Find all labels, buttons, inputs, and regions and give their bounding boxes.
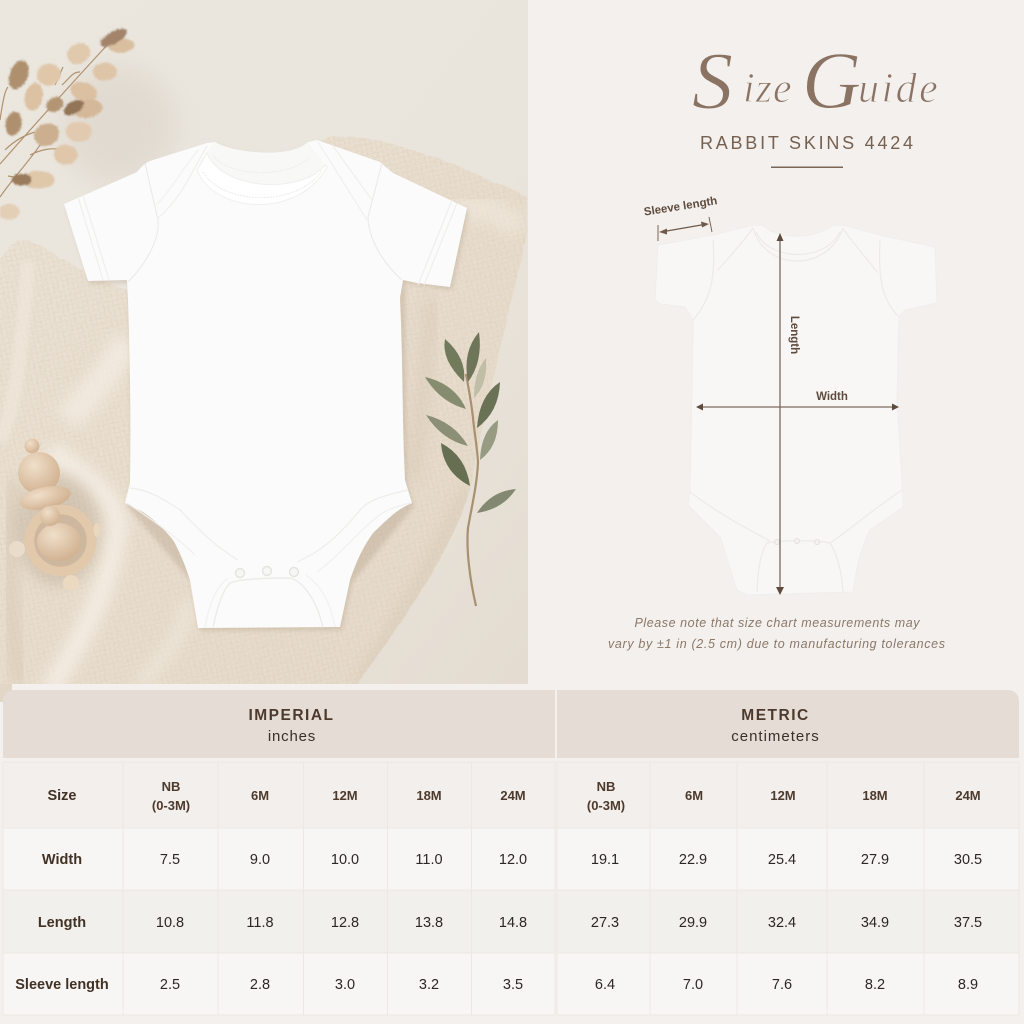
width row: 9.0 [250, 852, 270, 868]
length row: 13.8 [415, 915, 443, 931]
width row: 12.0 [499, 852, 527, 868]
width label: Width [816, 391, 848, 403]
lap shoulders and armholes [128, 163, 158, 282]
header row: 12M [332, 788, 358, 803]
collar and seams [690, 228, 902, 592]
olive branch [425, 332, 516, 606]
width row: 7.5 [160, 852, 180, 868]
back neck shading [207, 142, 325, 185]
header row: 6M [251, 788, 269, 803]
sleeve length row: 3.0 [335, 977, 355, 993]
photo corner behind header [0, 684, 12, 702]
length row: 11.8 [246, 915, 274, 931]
sleeve length row: 2.5 [160, 977, 180, 993]
tolerance note: vary by ±1 in (2.5 cm) due to manufacturing tolerances [608, 637, 945, 651]
width arrow [696, 404, 899, 410]
header row: (0-3M) [587, 798, 625, 813]
imperial header band: inches [268, 728, 316, 745]
header row: 6M [685, 788, 703, 803]
length row: 27.3 [591, 915, 619, 931]
width row: 22.9 [679, 852, 707, 868]
cloth blanket [0, 130, 528, 700]
width row [42, 852, 982, 868]
title script: uide [858, 66, 940, 112]
header row: 24M [955, 788, 981, 803]
header row: NB [597, 779, 615, 794]
bodysuit photo [64, 140, 467, 628]
sleeve length row [15, 977, 978, 993]
sleeve cuffs [78, 195, 109, 280]
bodysuit shadow [66, 209, 470, 632]
fabric folds [50, 450, 117, 690]
tolerance note [608, 616, 945, 651]
length row [38, 915, 982, 931]
bodysuit outline [655, 225, 937, 595]
width row: 19.1 [591, 852, 619, 868]
title script: G [802, 35, 861, 126]
sleeve length label: Sleeve length [643, 195, 718, 219]
header row: Size [47, 788, 77, 804]
length row: 29.9 [679, 915, 707, 931]
row backgrounds [3, 762, 1019, 1015]
width row: Width [42, 852, 82, 868]
length row: 10.8 [156, 915, 184, 931]
width row: 10.0 [331, 852, 359, 868]
length row: 37.5 [954, 915, 982, 931]
length label: Length [788, 316, 800, 354]
header row: 18M [862, 788, 888, 803]
sleeve length row: 7.6 [772, 977, 792, 993]
diagram: bodysuit with measurements [643, 195, 937, 595]
header row: NB [162, 779, 180, 794]
wooden rattle [9, 438, 100, 591]
collar band [197, 153, 327, 204]
length row: 34.9 [861, 915, 889, 931]
sleeve length row: 2.8 [250, 977, 270, 993]
sleeve length row: 3.5 [503, 977, 523, 993]
sleeve length row: 8.2 [865, 977, 885, 993]
snaps [236, 568, 244, 578]
leg bindings [130, 488, 238, 560]
width row: 27.9 [861, 852, 889, 868]
length row: Length [38, 915, 86, 931]
panel: product photo [0, 0, 528, 700]
sleeve length row: 6.4 [595, 977, 615, 993]
header row: 24M [500, 788, 526, 803]
header row: (0-3M) [152, 798, 190, 813]
imperial header band: IMPERIAL [248, 707, 335, 724]
width row: 25.4 [768, 852, 796, 868]
sleeve length arrow [658, 217, 712, 241]
length row: 14.8 [499, 915, 527, 931]
header row: 18M [416, 788, 442, 803]
plant shadow [64, 70, 170, 180]
subtitle: RABBIT SKINS 4424 [700, 133, 913, 153]
header row [47, 779, 981, 813]
sleeve length row: 7.0 [683, 977, 703, 993]
header row: 12M [770, 788, 796, 803]
sleeve length row: 3.2 [419, 977, 439, 993]
dried pampas plant [0, 23, 134, 218]
width row: 30.5 [954, 852, 982, 868]
title script: S [692, 35, 733, 126]
divider rule [771, 166, 843, 168]
title script: ize [743, 66, 793, 112]
imperial header band [3, 690, 555, 758]
length row: 12.8 [331, 915, 359, 931]
sleeve length row: 8.9 [958, 977, 978, 993]
metric header band: centimeters [731, 728, 820, 745]
size table [0, 684, 1019, 1015]
metric header band [557, 690, 1019, 758]
tolerance note: Please note that size chart measurements may [634, 616, 920, 630]
sleeve length row: Sleeve length [15, 977, 109, 993]
metric header band: METRIC [741, 707, 810, 724]
width row: 11.0 [415, 852, 443, 868]
length row: 32.4 [768, 915, 796, 931]
diagram snaps [774, 538, 820, 544]
length arrow [776, 233, 784, 595]
